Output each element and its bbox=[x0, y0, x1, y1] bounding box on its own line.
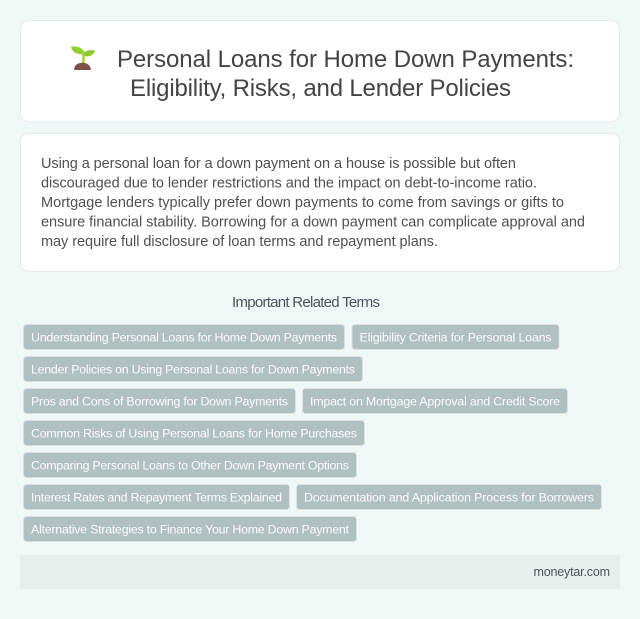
panel: summary text: Using a personal loan for a down payment on a house is possible but often bbox=[41, 156, 516, 172]
title: Eligibility, Risks, and Lender Policies bbox=[130, 75, 511, 102]
footer: moneytar.com bbox=[534, 565, 610, 579]
panel: title card bbox=[20, 20, 620, 122]
chip: comparing personal loans: Comparing Personal Loans to Other Down Payment Options bbox=[31, 458, 349, 472]
title bbox=[117, 46, 574, 102]
footer bbox=[20, 555, 620, 589]
title: Personal Loans for Home Down Payments: bbox=[117, 46, 574, 73]
heading: important related terms: Important Related Terms bbox=[232, 294, 380, 311]
term chips bbox=[24, 324, 602, 542]
chip: understanding personal loans bbox=[24, 324, 344, 350]
chip: eligibility criteria bbox=[352, 324, 559, 350]
chip: impact on mortgage approval bbox=[302, 388, 568, 414]
panel: summary text bbox=[20, 134, 620, 272]
chip: common risks bbox=[24, 420, 364, 446]
chip: pros and cons: Pros and Cons of Borrowing for Down Payments bbox=[31, 394, 288, 408]
chip: understanding personal loans: Understanding Personal Loans for Home Down Payments bbox=[31, 330, 337, 344]
icon: sprout bbox=[71, 46, 95, 70]
chip: documentation: Documentation and Application Process for Borrowers bbox=[304, 490, 594, 504]
chip: interest rates bbox=[24, 484, 290, 510]
panel: summary text: may require full disclosure of loan terms and repayment plans. bbox=[41, 234, 438, 250]
chip: common risks: Common Risks of Using Personal Loans for Home Purchases bbox=[31, 426, 357, 440]
chip: alternative strategies: Alternative Strategies to Finance Your Home Down Payment bbox=[31, 522, 350, 536]
chip: documentation bbox=[296, 484, 602, 510]
chip: lender policies bbox=[24, 356, 362, 382]
chip: alternative strategies bbox=[24, 516, 356, 542]
chip: lender policies: Lender Policies on Using Personal Loans for Down Payments bbox=[31, 362, 355, 376]
panel: summary text: ensure financial stability. Borrowing for a down payment can complicate approval and bbox=[41, 214, 585, 230]
chip: pros and cons bbox=[24, 388, 296, 414]
chip: comparing personal loans bbox=[24, 452, 356, 478]
chip: eligibility criteria: Eligibility Criteria for Personal Loans bbox=[360, 330, 552, 344]
panel: summary text: Mortgage lenders typically prefer down payments to come from savings or gifts to bbox=[41, 195, 564, 211]
chip: interest rates: Interest Rates and Repayment Terms Explained bbox=[31, 490, 282, 504]
chip: impact on mortgage approval: Impact on Mortgage Approval and Credit Score bbox=[310, 394, 560, 408]
panel: summary text: discouraged due to lender restrictions and the impact on debt-to-income ratio. bbox=[41, 176, 537, 192]
